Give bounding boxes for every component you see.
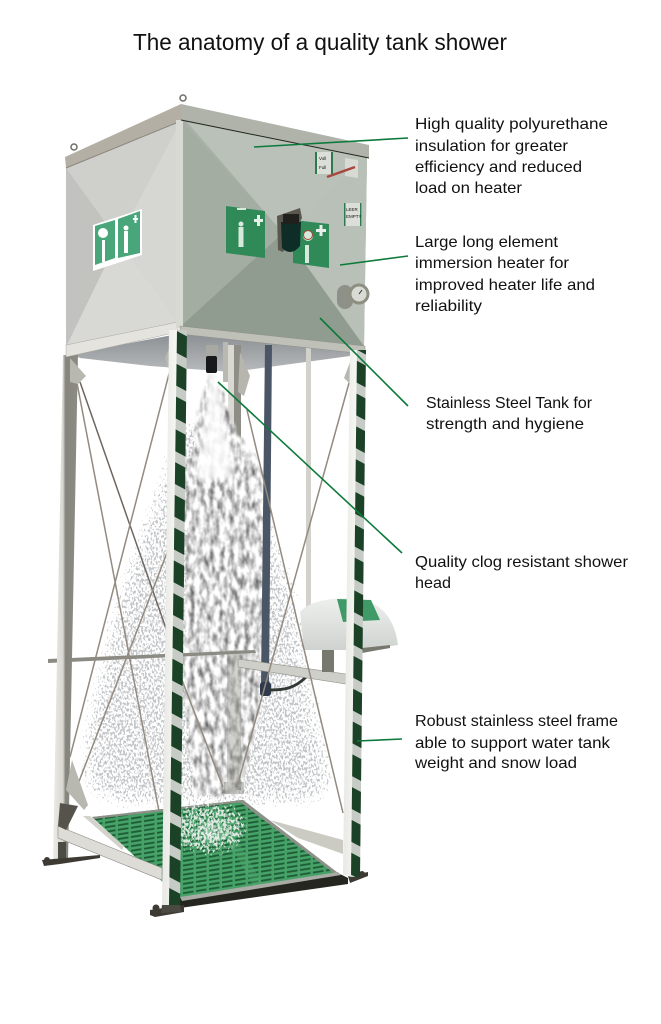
callout: immersion heater: immersion heater for	[415, 255, 570, 272]
callout: frame: Robust stainless steel frame	[415, 713, 618, 730]
empty level sticker: LEER	[346, 207, 359, 212]
feet	[42, 855, 368, 917]
eyewash bowl	[300, 598, 398, 672]
safety sign: eyewash	[293, 220, 329, 268]
rear thin rod	[306, 348, 311, 610]
callout: frame: able to support water tank	[415, 735, 611, 752]
brace brackets	[66, 342, 350, 810]
rear left leg	[53, 355, 78, 860]
right tank face	[176, 104, 369, 354]
callout: insulation: insulation for greater	[415, 138, 569, 155]
callout: stainless steel tank: strength and hygiene	[426, 416, 584, 433]
side support bar	[238, 659, 346, 684]
rear column seen through water	[224, 650, 244, 794]
full level sticker	[315, 152, 333, 174]
callout: immersion heater: reliability	[415, 298, 482, 315]
callout: insulation: load on heater	[415, 180, 523, 197]
safety sign: left face	[93, 209, 142, 271]
callout: immersion heater	[415, 234, 595, 315]
callout: stainless steel tank: Stainless Steel Tank for	[426, 395, 593, 412]
shower head	[206, 345, 218, 373]
beacon lamp	[277, 208, 312, 252]
leader: frame	[357, 739, 402, 741]
leader: immersion heater	[340, 256, 408, 265]
lifting eyelets	[71, 95, 186, 150]
title: The anatomy of a quality tank shower	[133, 29, 507, 55]
temperature gauge	[337, 284, 370, 309]
horizontal rod	[48, 650, 256, 663]
tank underside	[72, 334, 365, 372]
empty level sticker: EMPTY	[346, 214, 362, 219]
base frame	[58, 803, 348, 908]
rear centre column	[223, 342, 250, 790]
leader: stainless tank	[320, 318, 408, 406]
front leg with hazard stripes	[161, 330, 187, 913]
callout: shower head: head	[415, 575, 451, 592]
leader: shower head	[218, 382, 402, 553]
callout: frame	[414, 713, 618, 772]
callout: frame: weight and snow load	[414, 755, 577, 772]
full level sticker: Voll	[319, 156, 326, 161]
callout: insulation: efficiency and reduced	[415, 159, 582, 176]
level indicator	[327, 158, 358, 178]
leader lines	[218, 138, 408, 741]
shower floor grating	[92, 796, 338, 898]
callout: shower head	[415, 554, 629, 592]
tank shower illustration	[42, 95, 398, 917]
callout: shower head: Quality clog resistant shower	[415, 554, 629, 571]
callout: immersion heater: Large long element	[415, 234, 559, 251]
callout: insulation	[415, 116, 608, 197]
callout: insulation: High quality polyurethane	[415, 116, 608, 133]
left tank face	[65, 104, 181, 357]
callout: stainless steel tank	[426, 395, 593, 433]
empty level sticker	[344, 203, 362, 226]
full level sticker: Full	[319, 165, 326, 170]
faint spray cloud	[72, 400, 345, 815]
right leg with hazard stripes	[343, 350, 366, 877]
safety sign: shower	[226, 206, 265, 258]
callout: immersion heater: improved heater life and	[415, 277, 595, 294]
cross braces	[70, 370, 349, 827]
leader: insulation	[254, 138, 408, 147]
main water stream	[184, 375, 263, 795]
dark water pipe	[260, 345, 306, 696]
